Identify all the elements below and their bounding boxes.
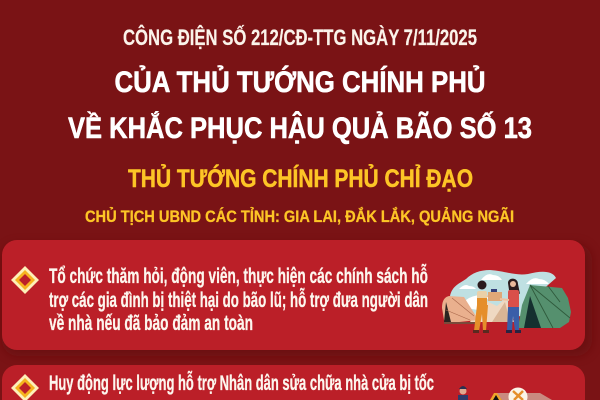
- illustration: repair icon, worker and house: [458, 386, 552, 400]
- clouds: [459, 274, 549, 310]
- text block: task 1: về nhà nếu đã bảo đảm an toàn: [49, 312, 253, 335]
- subheading: prime minister directs: THỦ TƯỚNG CHÍNH PHỦ CHỈ ĐẠO: [128, 163, 473, 193]
- woman right: red shirt, blue trousers: [500, 279, 521, 333]
- illustration: relief at tents: [442, 270, 571, 333]
- left tent: [442, 296, 478, 323]
- subheading: addressees: CHỦ TỊCH UBND CÁC TỈNH: GIA LAI, ĐẮK LẮK, QUẢNG NGÃI: [85, 206, 514, 226]
- woman left: orange uniform: [473, 280, 492, 333]
- panel: task 1: [2, 240, 592, 356]
- box: [488, 289, 502, 301]
- title line 1: CỦA THỦ TƯỚNG CHÍNH PHỦ: [114, 65, 486, 99]
- text block: task 1: [49, 264, 428, 335]
- panel: task 2: [2, 365, 585, 400]
- sky backdrop: [450, 270, 556, 320]
- right green tent: [518, 285, 571, 328]
- mountains: [470, 298, 514, 322]
- title line 2: VỀ KHẮC PHỤC HẬU QUẢ BÃO SỐ 13: [68, 111, 532, 145]
- heading: dispatch number: CÔNG ĐIỆN SỐ 212/CĐ-TTG NGÀY 7/11/2025: [123, 24, 477, 50]
- icon: diamond bullet 1: [11, 266, 39, 294]
- icon: diamond bullet 2: [11, 374, 39, 400]
